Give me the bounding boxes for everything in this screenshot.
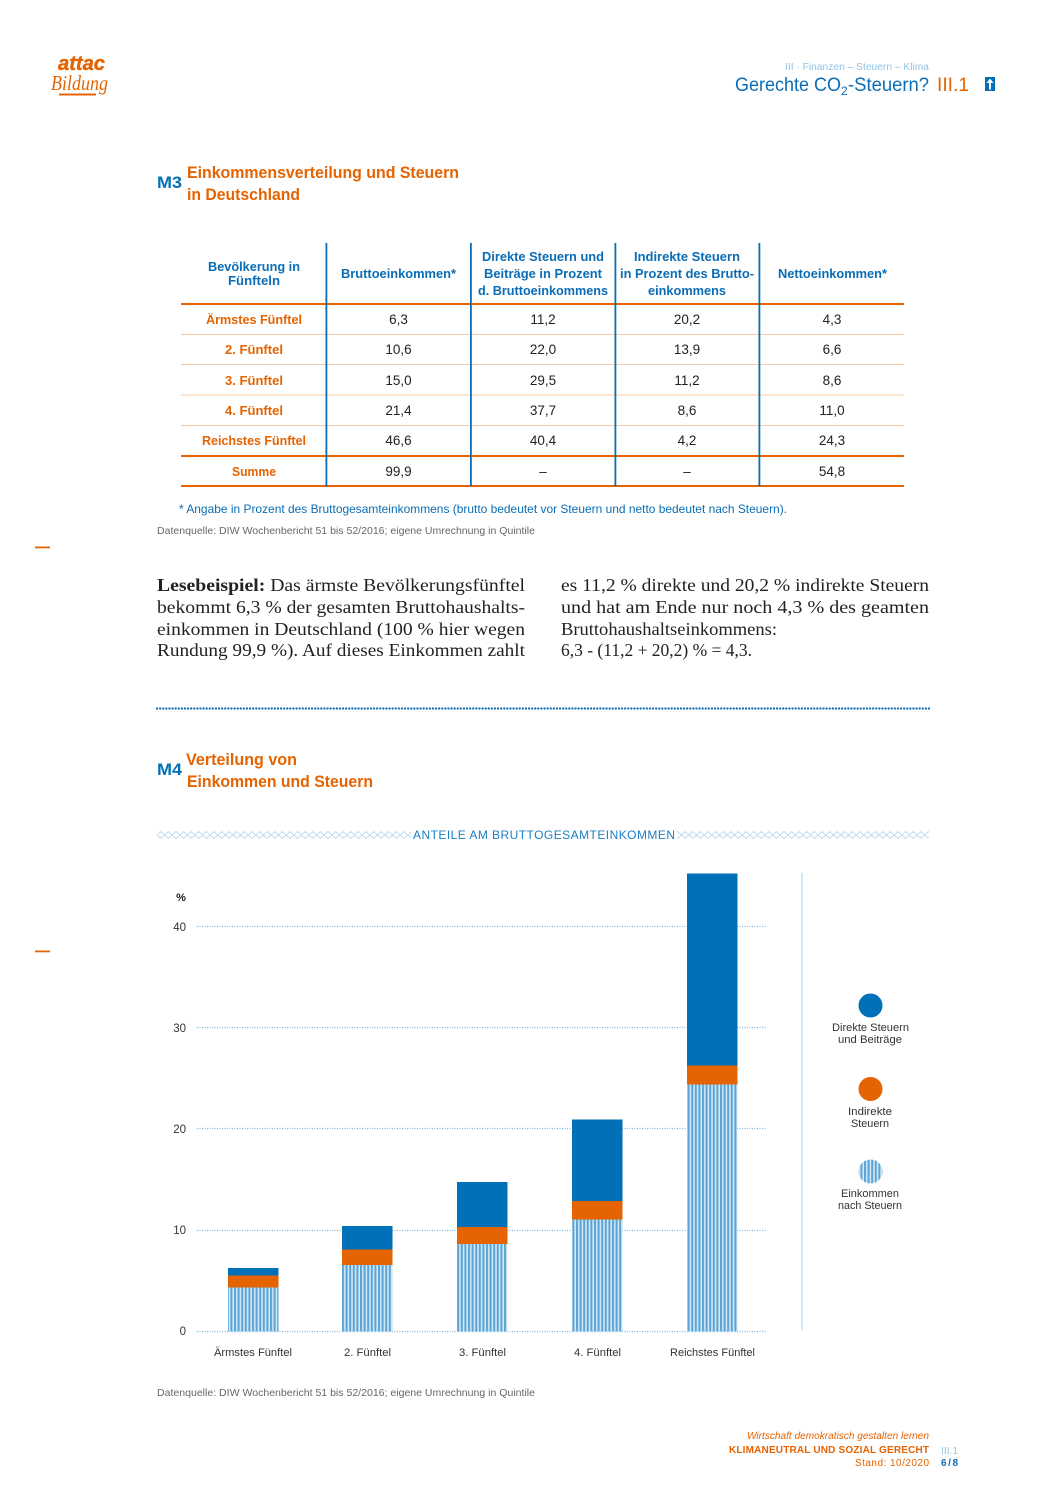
y axis bbox=[173, 892, 186, 1338]
logo: attac Bildung: attac bbox=[58, 53, 105, 75]
text block: reading example, right column: es 11,2 % direkte und 20,2 % indirekte Steuern bbox=[561, 575, 929, 595]
row: 2. Fünftel: 10,6 bbox=[385, 342, 412, 357]
table header row bbox=[208, 249, 888, 298]
legend bbox=[832, 994, 909, 1212]
page header: Gerechte CO bbox=[735, 74, 841, 96]
page footer: KLIMANEUTRAL UND SOZIAL GERECHT bbox=[729, 1445, 929, 1456]
page footer: III.1 bbox=[941, 1446, 958, 1457]
text block: reading example, left column: Rundung 99,9 %). Auf dieses Einkommen zahlt bbox=[157, 640, 525, 661]
x axis labels: 3. Fünftel bbox=[459, 1347, 506, 1359]
page footer: Stand: 10/2020 bbox=[855, 1458, 929, 1469]
page footer: Wirtschaft demokratisch gestalten lernen bbox=[747, 1431, 929, 1442]
table header row: Direkte Steuern und bbox=[482, 249, 604, 264]
page header: III · Finanzen – Steuern – Klima bbox=[785, 61, 929, 73]
page header: III.1 bbox=[937, 74, 969, 96]
bar: Reichstes Fünftel bbox=[687, 874, 738, 1332]
row: Summe: 99,9 bbox=[385, 464, 412, 479]
row: 4. Fünftel bbox=[225, 403, 845, 418]
chart title: ANTEILE AM BRUTTOGESAMTEINKOMMEN bbox=[413, 828, 675, 842]
heading: M4: Einkommen und Steuern bbox=[187, 772, 373, 791]
logo: attac Bildung: Bildung bbox=[51, 71, 108, 95]
text block: reading example, left column bbox=[157, 575, 525, 661]
page header: 2 bbox=[841, 84, 848, 98]
row: 4. Fünftel: 37,7 bbox=[530, 403, 556, 418]
source note M3: Datenquelle: DIW Wochenbericht 51 bis 52/2016; eigene Umrechnung in Quintile bbox=[157, 525, 535, 537]
bar: Ärmstes Fünftel bbox=[228, 1268, 278, 1332]
row: Summe: – bbox=[539, 464, 547, 479]
table header row: Nettoeinkommen* bbox=[778, 266, 888, 281]
legend item: indirect taxes bbox=[848, 1077, 892, 1130]
legend item: direct taxes bbox=[832, 994, 909, 1046]
y axis: 0 bbox=[180, 1326, 186, 1338]
legend item: indirect taxes: Indirekte bbox=[848, 1106, 892, 1118]
text block: reading example, left column: einkommen in Deutschland (100 % hier wegen bbox=[157, 619, 525, 640]
table footnote: * Angabe in Prozent des Bruttogesamteinkommens (brutto bedeutet vor Steuern und netto bedeutet nach Steuern). bbox=[179, 502, 787, 516]
heading: M3: in Deutschland bbox=[187, 185, 300, 204]
bar: 4. Fünftel bbox=[572, 1120, 622, 1332]
bar: 3. Fünftel bbox=[457, 1182, 508, 1332]
row: Ärmstes Fünftel: 6,3 bbox=[389, 312, 408, 327]
row: Ärmstes Fünftel bbox=[206, 312, 841, 327]
x axis labels: Reichstes Fünftel bbox=[670, 1347, 755, 1359]
x axis labels: 4. Fünftel bbox=[574, 1347, 621, 1359]
legend item: income after taxes bbox=[838, 1160, 902, 1212]
page footer: 6/8 bbox=[941, 1458, 958, 1469]
icon: up arrow bbox=[985, 77, 995, 91]
heading: M4: M4 bbox=[157, 760, 183, 779]
text block: reading example, right column: 6,3 - (11,2 + 20,2) % = 4,3. bbox=[561, 640, 752, 661]
row: 3. Fünftel: 29,5 bbox=[530, 373, 556, 388]
row: Reichstes Fünftel: 4,2 bbox=[678, 433, 696, 448]
row: Reichstes Fünftel: 24,3 bbox=[819, 433, 845, 448]
legend item: direct taxes: Direkte Steuern bbox=[832, 1022, 909, 1034]
row: Ärmstes Fünftel: 20,2 bbox=[674, 312, 700, 327]
x axis labels bbox=[214, 1347, 755, 1359]
heading: M3: Einkommensverteilung und Steuern bbox=[187, 163, 459, 182]
table header row: Bevölkerung in bbox=[208, 259, 300, 274]
row: 3. Fünftel: 11,2 bbox=[674, 373, 700, 388]
row: 4. Fünftel: 11,0 bbox=[819, 403, 845, 418]
x axis labels: Ärmstes Fünftel bbox=[214, 1347, 292, 1359]
table header row: in Prozent des Brutto- bbox=[620, 266, 754, 281]
legend item: income after taxes: nach Steuern bbox=[838, 1200, 902, 1212]
heading: M4 bbox=[157, 750, 373, 791]
row: Ärmstes Fünftel: Ärmstes Fünftel bbox=[206, 312, 302, 327]
source note M4: Datenquelle: DIW Wochenbericht 51 bis 52/2016; eigene Umrechnung in Quintile bbox=[157, 1387, 535, 1399]
row: 2. Fünftel: 2. Fünftel bbox=[225, 342, 283, 357]
row: Reichstes Fünftel: 40,4 bbox=[530, 433, 557, 448]
row: 3. Fünftel: 3. Fünftel bbox=[225, 373, 283, 388]
heading: M3 bbox=[157, 163, 459, 204]
text block: reading example, right column: Bruttohaushaltseinkommens: bbox=[561, 619, 777, 639]
table: income distribution bbox=[181, 243, 904, 487]
row: Ärmstes Fünftel: 4,3 bbox=[823, 312, 841, 327]
heading: M3: M3 bbox=[157, 173, 182, 192]
row: Summe: – bbox=[683, 464, 691, 479]
y axis: 20 bbox=[173, 1124, 186, 1136]
row: 4. Fünftel: 21,4 bbox=[385, 403, 412, 418]
row: Summe: Summe bbox=[232, 464, 276, 479]
y axis: 40 bbox=[173, 922, 186, 934]
row: Summe: 54,8 bbox=[819, 464, 845, 479]
row: 3. Fünftel: 8,6 bbox=[823, 373, 841, 388]
row: 4. Fünftel: 4. Fünftel bbox=[225, 403, 283, 418]
row: Ärmstes Fünftel: 11,2 bbox=[530, 312, 556, 327]
table header row: einkommens bbox=[648, 283, 726, 298]
row: 2. Fünftel: 22,0 bbox=[530, 342, 556, 357]
table header row: Beiträge in Prozent bbox=[484, 266, 603, 281]
row: 4. Fünftel: 8,6 bbox=[678, 403, 696, 418]
table header row: Fünfteln bbox=[228, 273, 280, 288]
row: Reichstes Fünftel bbox=[202, 433, 845, 448]
page header: -Steuern? bbox=[848, 74, 929, 96]
table header row: d. Bruttoeinkommens bbox=[478, 283, 608, 298]
row: Reichstes Fünftel: Reichstes Fünftel bbox=[202, 433, 306, 448]
table header row: Bruttoeinkommen* bbox=[341, 266, 457, 281]
y axis: % bbox=[176, 892, 186, 904]
row: Reichstes Fünftel: 46,6 bbox=[385, 433, 412, 448]
y axis: 30 bbox=[173, 1023, 186, 1035]
legend item: income after taxes: Einkommen bbox=[841, 1188, 899, 1200]
table header row: Indirekte Steuern bbox=[634, 249, 740, 264]
text block: reading example, right column bbox=[561, 575, 929, 661]
row: 2. Fünftel: 6,6 bbox=[823, 342, 841, 357]
legend item: indirect taxes: Steuern bbox=[851, 1118, 889, 1130]
text block: reading example, right column: und hat am Ende nur noch 4,3 % des geamten bbox=[561, 597, 929, 617]
page header bbox=[735, 61, 969, 98]
bar chart: income and taxes by quintile bbox=[173, 874, 766, 1359]
logo: attac Bildung bbox=[51, 53, 108, 96]
x axis labels: 2. Fünftel bbox=[344, 1347, 391, 1359]
bar: 2. Fünftel bbox=[342, 1226, 392, 1332]
margin mark bbox=[35, 950, 50, 952]
text block: reading example, left column: Lesebeispiel: Das ärmste Bevölkerungsfünftel bbox=[157, 575, 525, 595]
text block: reading example, left column: bekommt 6,3 % der gesamten Bruttohaushalts- bbox=[157, 597, 525, 617]
row: Summe bbox=[232, 464, 845, 479]
row: 3. Fünftel bbox=[225, 373, 841, 388]
page footer bbox=[729, 1431, 958, 1469]
heading: M4: Verteilung von bbox=[186, 750, 297, 769]
row: 2. Fünftel: 13,9 bbox=[674, 342, 700, 357]
legend item: direct taxes: und Beiträge bbox=[838, 1034, 902, 1046]
row: 3. Fünftel: 15,0 bbox=[385, 373, 412, 388]
row: 2. Fünftel bbox=[225, 342, 841, 357]
margin mark bbox=[35, 546, 50, 548]
y axis: 10 bbox=[173, 1225, 186, 1237]
